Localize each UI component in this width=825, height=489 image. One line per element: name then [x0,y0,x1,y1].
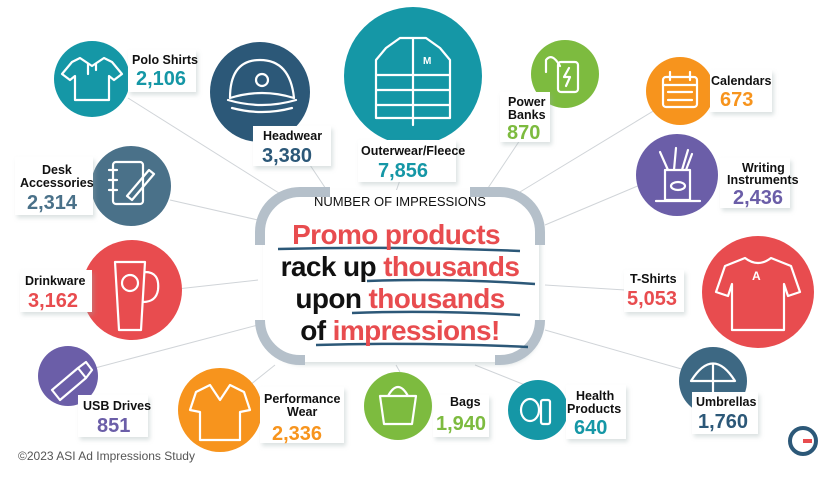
item: bags: Bags [450,395,481,409]
item: polo shirts [54,41,198,117]
item: usb drives: 851 [97,415,130,437]
item: headwear [210,42,331,167]
item: outerwear [344,7,482,182]
item: headwear: 3,380 [262,145,312,167]
item: umbrellas [679,347,758,434]
item: outerwear: Outerwear/Fleece [361,144,465,158]
item: headwear: Headwear [263,129,322,143]
item: performance wear: Performance [264,392,340,406]
headline: upon thousands [295,283,505,314]
footer: ©2023 ASI Ad Impressions Study [18,449,195,463]
item: performance wear [178,368,344,452]
headline [278,219,535,347]
item: bags [364,372,489,440]
item: outerwear: M [423,56,431,67]
item: bags: 1,940 [436,413,486,435]
item: power banks [500,40,599,144]
item: calendars: 673 [720,89,753,111]
item: usb drives: USB Drives [83,399,151,413]
logo [790,428,816,454]
item: t-shirts [624,236,814,348]
item: desk accessories: 2,314 [27,192,78,214]
item: writing instruments [636,134,799,216]
item: t-shirts: 5,053 [627,288,677,310]
item: writing instruments: Instruments [727,173,799,187]
item: umbrellas: Umbrellas [696,395,756,409]
item: performance wear: Wear [287,405,317,419]
item: polo shirts: 2,106 [136,68,186,90]
headline: Promo products [292,219,500,250]
item: drinkware: Drinkware [25,274,85,288]
item: t-shirts: A [752,269,761,283]
item: power banks: Power [508,95,546,109]
item: calendars: Calendars [711,74,771,88]
item: health products [508,380,626,440]
item: umbrellas: 1,760 [698,411,748,433]
item: health products: Products [567,402,621,416]
item: desk accessories: Desk [42,163,72,177]
item: usb drives [38,346,151,437]
subheading: NUMBER OF IMPRESSIONS [314,194,486,209]
item: writing instruments: 2,436 [733,187,783,209]
item: health products: 640 [574,417,607,439]
item: power banks: Banks [508,108,546,122]
item: calendars [646,57,772,125]
item: writing instruments: Writing [742,161,785,175]
headline: rack up thousands [281,251,519,282]
item: health products: Health [576,389,614,403]
item: t-shirts: T-Shirts [630,272,677,286]
item: power banks: 870 [507,122,540,144]
item: drinkware: 3,162 [28,290,78,312]
connector lines [95,98,685,385]
center panel [260,190,540,362]
item: outerwear: 7,856 [378,160,428,182]
headline: of impressions! [300,315,500,346]
item: polo shirts: Polo Shirts [132,53,198,67]
item: drinkware [20,240,182,340]
item: desk accessories: Accessories [20,176,94,190]
item: performance wear: 2,336 [272,423,322,445]
item: desk accessories [15,146,171,226]
